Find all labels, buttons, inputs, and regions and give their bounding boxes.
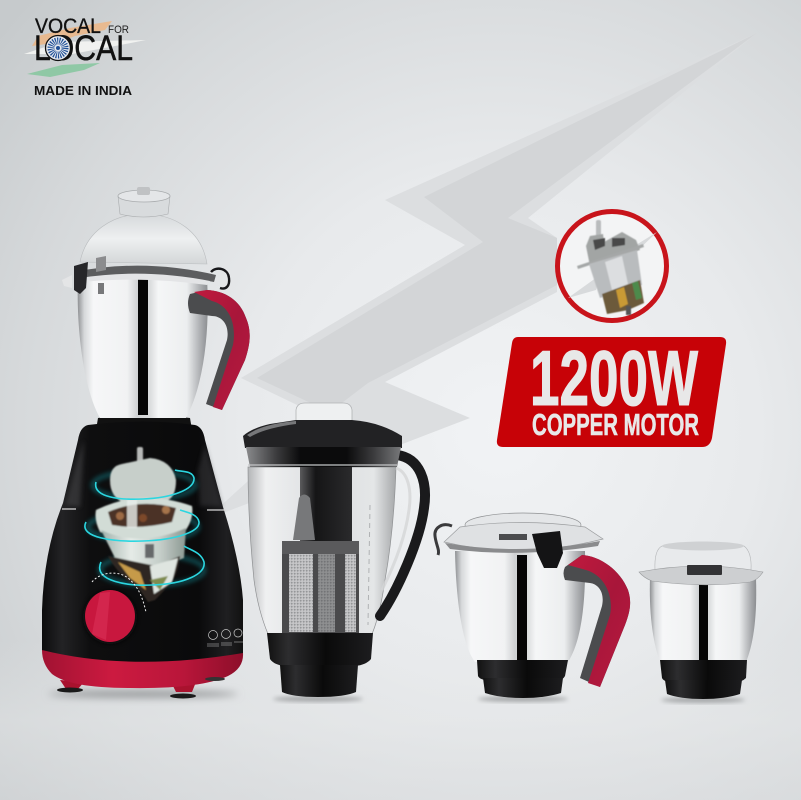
motor callout circle <box>558 212 666 320</box>
blade base <box>267 633 373 666</box>
power rating: 1200W <box>530 334 698 422</box>
small steel jar with lid <box>639 542 763 699</box>
blade base <box>477 660 568 680</box>
icon: chakra <box>46 36 70 60</box>
logo: vocal for local, made in india <box>24 15 146 98</box>
motor cutaway <box>96 447 192 602</box>
logo tricolour brush strokes <box>24 21 146 77</box>
1200W copper motor badge <box>497 334 726 447</box>
steel body <box>650 578 756 662</box>
body sheen <box>66 440 84 507</box>
certification icons <box>207 629 243 646</box>
base coupling <box>96 415 192 430</box>
lid collar <box>246 447 401 467</box>
translucent lid <box>444 513 603 553</box>
teal rings <box>85 470 204 585</box>
icon: bolt in circle <box>620 232 657 258</box>
central column <box>300 467 352 542</box>
made in india: MADE IN INDIA <box>34 83 133 98</box>
centre stripe <box>517 555 527 665</box>
centre stripe <box>138 278 148 415</box>
steel body <box>78 276 208 418</box>
jar rim <box>74 266 216 282</box>
motor type: COPPER MOTOR <box>532 407 699 442</box>
handle <box>188 290 250 410</box>
clear lid <box>639 542 763 585</box>
front clip <box>532 531 563 568</box>
steel body <box>455 551 585 662</box>
black lid <box>243 420 402 448</box>
selector knob <box>83 590 137 644</box>
measuring marks <box>368 505 370 625</box>
dome lid <box>80 187 207 264</box>
glass blender jar with filter <box>243 403 425 697</box>
centre stripe <box>699 580 708 660</box>
teal ring glow rear <box>88 471 204 585</box>
logo: vocal for local, made in india: FOR <box>108 24 129 36</box>
large steel jar with dome lid <box>62 187 250 418</box>
logo heading: VOCAL <box>35 15 101 38</box>
blade base <box>660 660 747 682</box>
logo: vocal for local, made in india: LOCAL <box>34 29 133 68</box>
right clip <box>211 269 229 289</box>
red band and feet <box>42 650 243 698</box>
medium steel jar with lid <box>435 513 630 698</box>
icon: copper motor <box>577 220 644 315</box>
body seam <box>62 509 226 510</box>
juicer handle <box>380 455 425 616</box>
blender base with motor <box>42 415 243 698</box>
pusher cone <box>293 494 315 540</box>
black body <box>42 422 243 664</box>
lid cap <box>296 403 352 427</box>
control dial markings <box>92 573 146 612</box>
filter basket <box>282 541 359 633</box>
product shadows <box>48 690 745 703</box>
handle <box>564 555 630 687</box>
left clamp <box>62 256 106 294</box>
glass body <box>248 467 396 634</box>
left clip <box>435 525 452 555</box>
lightning bolt graphic <box>205 33 757 520</box>
